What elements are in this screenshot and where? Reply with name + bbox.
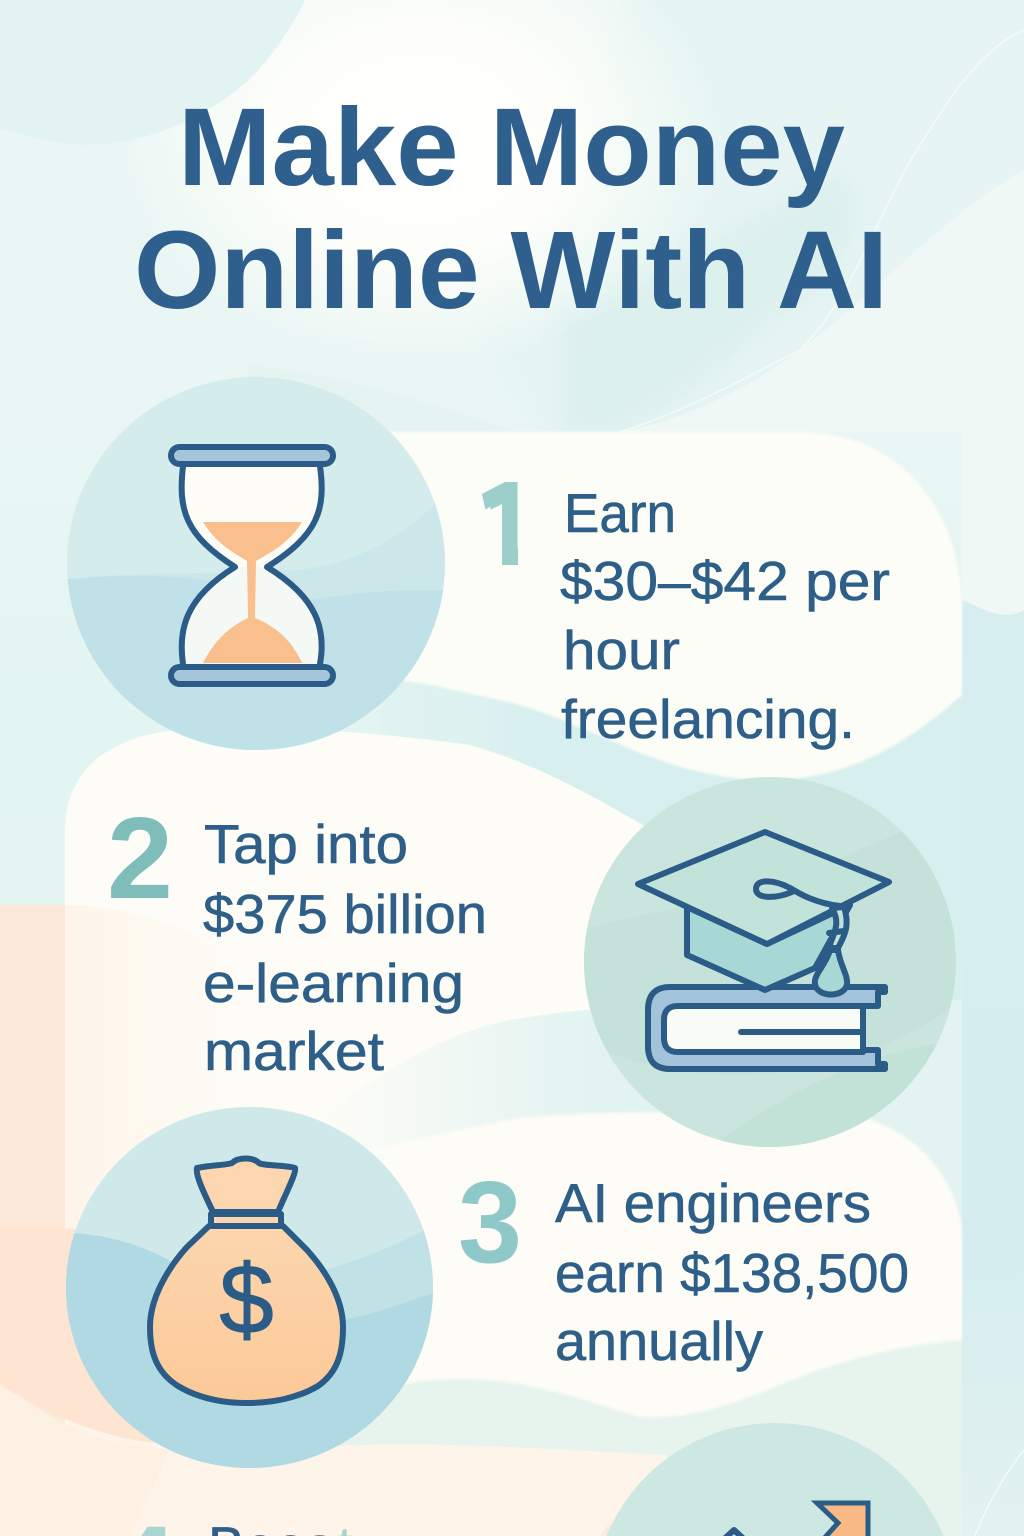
panel: item 3 background <box>300 1112 962 1418</box>
text block 3: AI engineers <box>555 1172 871 1234</box>
book <box>648 987 885 1069</box>
rising line <box>722 1530 746 1536</box>
panel: item 2 peach fade <box>65 905 240 1300</box>
cap top <box>638 832 889 944</box>
title: Online With AI <box>134 209 888 332</box>
background blob top left <box>0 0 305 145</box>
money bag band <box>211 1214 281 1226</box>
number 2: 2 <box>107 793 173 923</box>
text block 3: annually <box>555 1310 763 1372</box>
text block 1: freelancing. <box>561 688 855 750</box>
number 3: 3 <box>458 1157 522 1287</box>
item 4 number and text, cropped by the frame <box>112 1502 353 1536</box>
text block 1: $30–$42 per <box>560 550 890 612</box>
icon: hourglass circle <box>60 370 460 760</box>
dollar sign: $ <box>219 1244 274 1354</box>
text block 3 <box>555 1172 909 1372</box>
text block 2 <box>203 813 487 1082</box>
arrow head <box>817 1503 868 1536</box>
background peach wave <box>0 1227 190 1445</box>
title <box>134 86 888 332</box>
book pages <box>664 1006 863 1052</box>
tassel <box>756 881 847 994</box>
text block 3: earn $138,500 <box>555 1242 909 1304</box>
hourglass top bar <box>171 447 333 464</box>
text block 1: Earn <box>564 482 676 544</box>
hourglass bottom bar <box>171 667 333 684</box>
text block 1: hour <box>563 619 680 681</box>
icon: growth arrow circle <box>606 1423 944 1536</box>
text block 1 <box>560 482 890 750</box>
panel: item 1 background <box>390 432 962 780</box>
text block 2: $375 billion <box>203 883 487 945</box>
hourglass sand <box>203 522 302 663</box>
text block 2: e-learning <box>203 952 464 1014</box>
icon: graduation cap and book circle <box>580 770 960 1155</box>
panel: item 2 background <box>65 729 700 1240</box>
hourglass glass <box>182 466 322 664</box>
title: Make Money <box>178 86 845 209</box>
text block 2: Tap into <box>204 813 408 875</box>
text block 2: market <box>204 1020 384 1082</box>
cap base <box>687 905 850 990</box>
number 1: 1 <box>466 460 536 590</box>
money bag <box>197 1158 295 1212</box>
icon: money bag circle <box>60 1100 440 1475</box>
